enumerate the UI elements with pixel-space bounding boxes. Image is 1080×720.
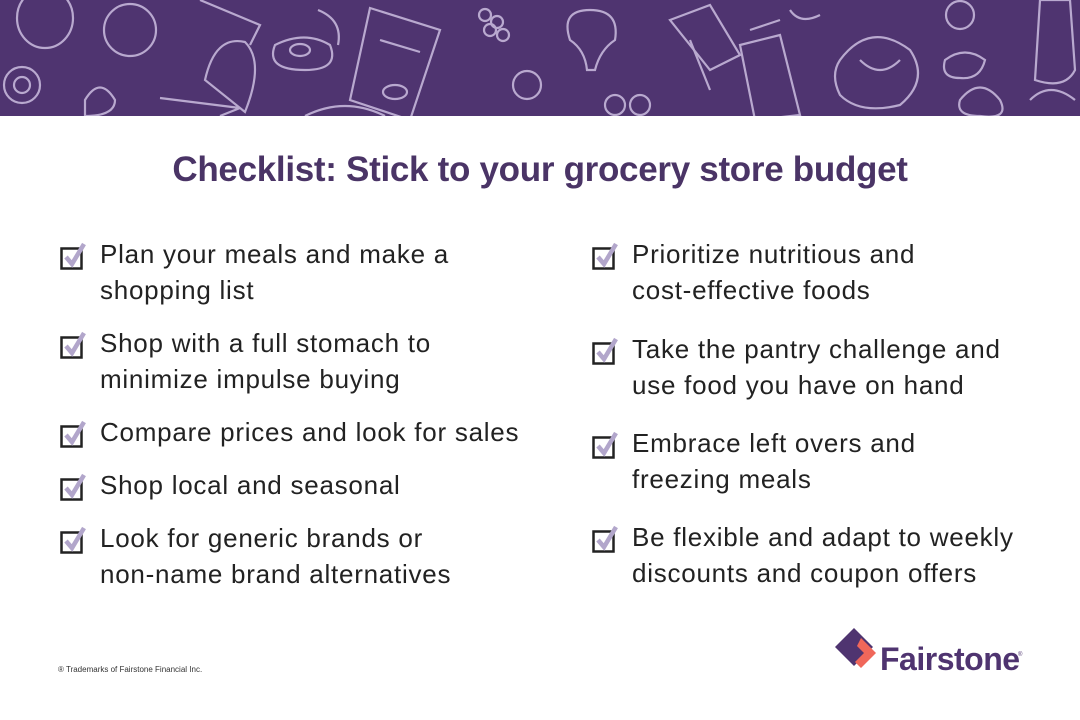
item: nutritious foods (592, 239, 915, 305)
item: flexible: discounts and coupon offers (632, 558, 977, 588)
right checklist column (592, 239, 1014, 588)
item: full stomach (60, 328, 431, 394)
item: leftovers: Embrace left overs and (632, 428, 916, 458)
item: shop local: Shop local and seasonal (100, 470, 401, 500)
item: full stomach: Shop with a full stomach to (100, 328, 431, 358)
left checklist column (60, 239, 519, 589)
item: leftovers (592, 428, 916, 494)
item: nutritious foods: cost-effective foods (632, 275, 871, 305)
item: pantry challenge: Take the pantry challenge and (632, 334, 1001, 364)
item: flexible (592, 522, 1014, 588)
title: Checklist: Stick to your grocery store budget (172, 150, 908, 189)
item: nutritious foods: Prioritize nutritious and (632, 239, 915, 269)
item: pantry challenge: use food you have on hand (632, 370, 964, 400)
item: generic brands: Look for generic brands or (100, 523, 423, 553)
item: flexible: Be flexible and adapt to weekly (632, 522, 1014, 552)
Fairstone logo (835, 628, 1023, 677)
item: full stomach: minimize impulse buying (100, 364, 400, 394)
footer trademark note: ® Trademarks of Fairstone Financial Inc. (58, 665, 202, 674)
header banner with food doodles (0, 0, 1080, 116)
item: generic brands: non-name brand alternatives (100, 559, 451, 589)
item: plan meals: Plan your meals and make a (100, 239, 449, 269)
item: generic brands (60, 523, 451, 589)
Fairstone logo: Fairstone (880, 641, 1020, 677)
item: plan meals (60, 239, 449, 305)
item: pantry challenge (592, 334, 1001, 400)
item: plan meals: shopping list (100, 275, 254, 305)
item: leftovers: freezing meals (632, 464, 812, 494)
Fairstone logo: ® (1018, 651, 1023, 658)
item: compare prices: Compare prices and look for sales (100, 417, 519, 447)
